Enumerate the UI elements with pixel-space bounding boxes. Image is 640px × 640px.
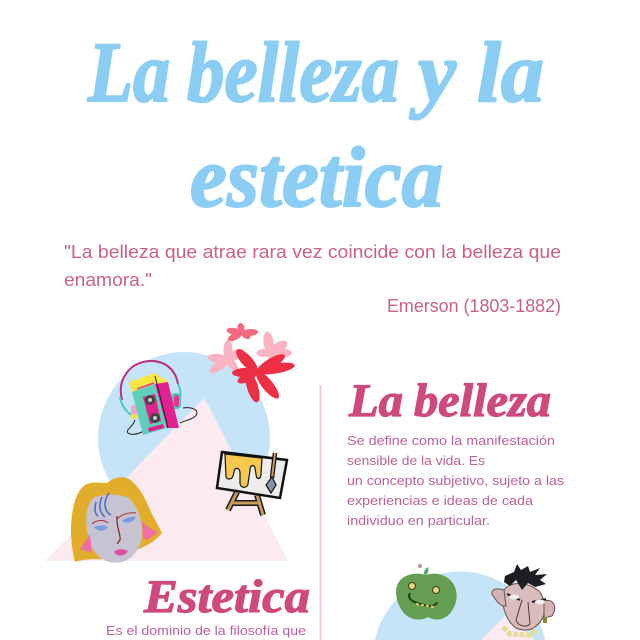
background triangle: left [45, 399, 288, 561]
text: La belleza description [347, 433, 565, 528]
heading: La belleza: belleza [414, 375, 551, 427]
icon: easel with painting [217, 452, 287, 515]
quote: enamora." [64, 270, 152, 290]
text: La belleza description: experiencias e ideas de cada [347, 493, 534, 508]
icon: cassette player with headphones [120, 361, 197, 435]
quote: "La belleza que atrae rara vez coincide con la belleza que [64, 242, 561, 262]
background circle: left [98, 352, 270, 524]
heading: La belleza [348, 375, 551, 427]
background circle: right [375, 572, 545, 640]
text: La belleza description: individuo en particular. [347, 513, 490, 528]
title: estetica [190, 129, 443, 225]
title: La [87, 24, 170, 120]
icon: green apple [396, 564, 457, 620]
title: la [477, 24, 544, 120]
text: La belleza description: un concepto subjetivo, sujeto a las [347, 473, 565, 488]
divider [320, 385, 322, 640]
quote [64, 242, 561, 316]
heading: Estetica: Estetica [143, 571, 310, 623]
title [87, 24, 544, 225]
icon: caricature man [492, 564, 555, 635]
quote: Emerson (1803-1882) [387, 296, 561, 316]
text: Estetica description: Es el dominio de la filosofía que [106, 623, 306, 638]
icon: woman's face [71, 477, 162, 563]
icon: flowers [207, 322, 296, 404]
heading: La belleza: La [348, 375, 403, 427]
text: La belleza description: Se define como la manifestación [347, 433, 555, 448]
background triangle: right [481, 613, 535, 640]
text: La belleza description: sensible de la vida. Es [347, 453, 486, 468]
title: belleza [187, 24, 399, 120]
title: y [409, 24, 457, 120]
